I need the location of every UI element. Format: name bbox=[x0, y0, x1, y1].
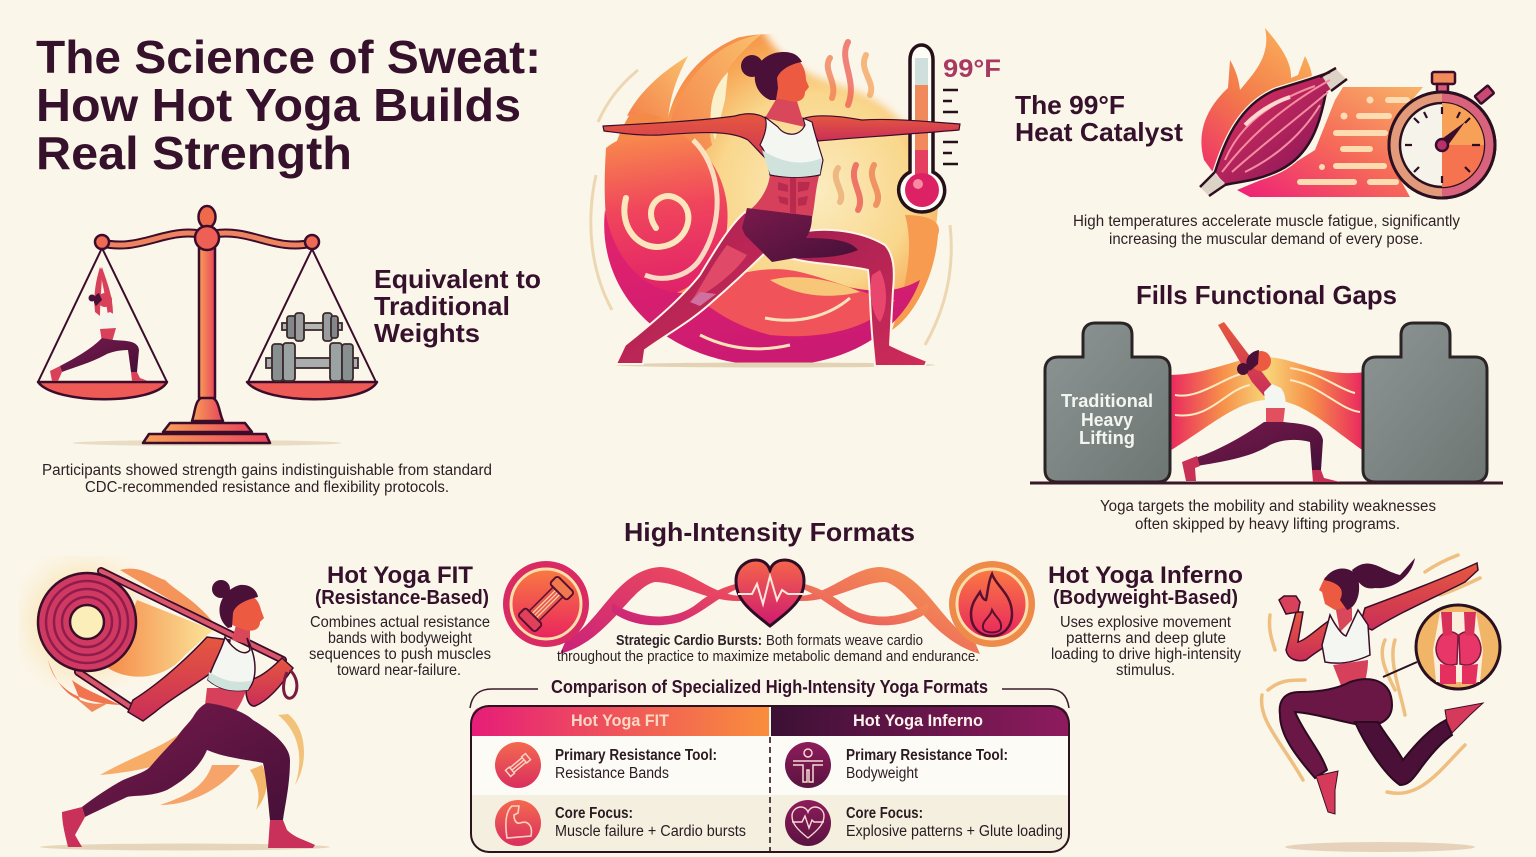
header: hot yoga fit bbox=[471, 706, 769, 736]
thermometer bbox=[899, 45, 958, 212]
illustration: lunge with resistance band roll bbox=[30, 567, 330, 850]
text: hot yoga fit description: Combines actual resistance bbox=[310, 614, 490, 631]
heading: equivalent to traditional weights: Traditional bbox=[374, 291, 510, 321]
text: high temperatures: increasing the muscular demand of every pose. bbox=[1109, 231, 1423, 248]
label: traditional heavy lifting: Lifting bbox=[1079, 428, 1135, 448]
title: Real Strength bbox=[36, 127, 352, 179]
heading: comparison bbox=[470, 677, 1069, 708]
text: hot yoga fit description: bands with bodyweight bbox=[328, 630, 473, 647]
magnifier circle: glutes bbox=[1416, 605, 1500, 689]
title bbox=[36, 31, 541, 179]
energy ribbon bbox=[1168, 357, 1365, 452]
header: hot yoga inferno: Hot Yoga Inferno bbox=[853, 711, 983, 730]
icon: heart with pulse bbox=[736, 560, 804, 626]
text: strategic cardio bursts bbox=[557, 633, 979, 665]
cell: core focus, explosive patterns bbox=[846, 805, 1063, 840]
text: strategic cardio bursts: Both formats weave cardio bbox=[766, 633, 923, 649]
cell: primary resistance tool, bands: Primary Resistance Tool: bbox=[555, 747, 717, 764]
heading: hot yoga fit bbox=[315, 562, 489, 609]
title: How Hot Yoga Builds bbox=[36, 79, 521, 131]
heading: hot yoga inferno: (Bodyweight-Based) bbox=[1053, 587, 1238, 609]
speed trail bbox=[1237, 87, 1423, 197]
flames bbox=[48, 569, 304, 810]
text: yoga targets: Yoga targets the mobility and stability weaknesses bbox=[1100, 498, 1436, 515]
heading: hot yoga inferno bbox=[1048, 562, 1243, 609]
cell: core focus, explosive patterns: Explosive patterns + Glute loading bbox=[846, 823, 1063, 840]
icon: body outline bbox=[785, 742, 831, 788]
left strands bbox=[560, 567, 742, 654]
cell: core focus, explosive patterns: Core Focus: bbox=[846, 805, 923, 822]
text: hot yoga fit description bbox=[309, 614, 491, 679]
figure: warrior pose bbox=[603, 52, 960, 366]
text: high temperatures: High temperatures accelerate muscle fatigue, significantly bbox=[1073, 213, 1460, 230]
right strands bbox=[798, 567, 980, 654]
text: hot yoga fit description: sequences to push muscles bbox=[309, 646, 491, 663]
figure bbox=[1279, 558, 1483, 814]
illustration: yoga between weight blocks bbox=[1030, 322, 1503, 483]
heading: comparison: Comparison of Specialized High-Intensity Yoga Formats bbox=[551, 677, 988, 697]
label: 99 degrees: 99°F bbox=[943, 55, 1001, 83]
illustration: balance scale with yoga and weights bbox=[38, 206, 377, 446]
header: hot yoga inferno bbox=[771, 706, 1069, 736]
heading: fills functional gaps: Fills Functional Gaps bbox=[1136, 280, 1397, 310]
text: yoga targets: often skipped by heavy lifting programs. bbox=[1135, 516, 1400, 533]
heading: high-intensity formats: High-Intensity Formats bbox=[624, 517, 915, 547]
label: traditional heavy lifting bbox=[1061, 391, 1153, 448]
stopwatch bbox=[1389, 72, 1495, 198]
cell: primary resistance tool, bodyweight: Bodyweight bbox=[846, 765, 919, 782]
cell: primary resistance tool, bodyweight bbox=[846, 747, 1008, 782]
cell: core focus, muscle failure: Muscle failure + Cardio bursts bbox=[555, 823, 746, 840]
illustration: intertwined format ribbon with heart bbox=[503, 560, 1035, 654]
figure bbox=[62, 580, 315, 848]
pointer line bbox=[1383, 662, 1417, 677]
soft top right fade bbox=[760, 26, 950, 200]
text: participants bbox=[42, 462, 492, 496]
motion swooshes bbox=[1262, 555, 1480, 793]
text: hot yoga inferno description: patterns and deep glute bbox=[1066, 630, 1226, 647]
muscle bbox=[1198, 68, 1347, 197]
illustration: muscle, flame and stopwatch bbox=[1198, 28, 1495, 198]
cell: primary resistance tool, bands: Resistance Bands bbox=[555, 765, 669, 782]
icon: flame circle bbox=[949, 561, 1035, 647]
text: hot yoga inferno description: loading to drive high-intensity bbox=[1051, 646, 1241, 663]
heading: hot yoga fit: Hot Yoga FIT bbox=[327, 562, 473, 589]
heading: equivalent to traditional weights: Weights bbox=[374, 318, 480, 348]
weight block left bbox=[1045, 323, 1170, 482]
icon: small yoga figure on left pan bbox=[50, 267, 148, 381]
comparison table bbox=[471, 706, 1069, 852]
text: yoga targets bbox=[1100, 498, 1436, 533]
lower magenta crescent bbox=[604, 210, 920, 366]
heading: the 99F heat catalyst bbox=[1015, 90, 1183, 147]
heading: hot yoga fit: (Resistance-Based) bbox=[315, 587, 489, 609]
illustration: jumping figure with glute magnifier bbox=[1262, 555, 1500, 852]
right band bbox=[892, 215, 939, 330]
text: participants: CDC-recommended resistance and flexibility protocols. bbox=[85, 479, 449, 496]
heading: hot yoga inferno: Hot Yoga Inferno bbox=[1048, 562, 1243, 589]
flame bbox=[1201, 28, 1312, 175]
text: high temperatures bbox=[1073, 213, 1460, 248]
rolled mat bbox=[38, 571, 283, 710]
title: The Science of Sweat: bbox=[36, 31, 541, 83]
icon: resistance bands bbox=[495, 742, 541, 788]
text: strategic cardio bursts: Strategic Cardio Bursts: bbox=[616, 633, 762, 649]
icon: resistance band circle bbox=[503, 561, 589, 647]
illustration: warrior pose hero with heat swirl bbox=[591, 26, 1001, 368]
heat waves bbox=[828, 42, 878, 210]
top left gap bbox=[597, 30, 760, 118]
header: hot yoga fit: Hot Yoga FIT bbox=[571, 711, 670, 730]
text: hot yoga fit description: toward near-failure. bbox=[337, 662, 461, 679]
cell: primary resistance tool, bands bbox=[555, 747, 717, 782]
cell: primary resistance tool, bodyweight: Primary Resistance Tool: bbox=[846, 747, 1008, 764]
icon: heartbeat bbox=[785, 800, 831, 846]
figure: crescent lunge bbox=[1182, 322, 1340, 482]
red swirl bbox=[605, 132, 728, 300]
icon: dumbbells on right pan bbox=[266, 313, 358, 381]
label: traditional heavy lifting: Heavy bbox=[1081, 410, 1133, 430]
weight block right bbox=[1363, 323, 1487, 482]
row backgrounds bbox=[471, 736, 1069, 852]
text: strategic cardio bursts: throughout the practice to maximize metabolic demand and endurance. bbox=[557, 649, 979, 665]
label: traditional heavy lifting: Traditional bbox=[1061, 391, 1153, 411]
text: hot yoga inferno description: Uses explosive movement bbox=[1060, 614, 1232, 631]
text: hot yoga inferno description: stimulus. bbox=[1116, 662, 1175, 679]
text: hot yoga inferno description bbox=[1051, 614, 1241, 679]
icon: bicep bbox=[495, 800, 541, 846]
heat swirl disc bbox=[591, 26, 951, 366]
cell: core focus, muscle failure bbox=[555, 805, 746, 840]
heading: the 99F heat catalyst: Heat Catalyst bbox=[1015, 117, 1183, 147]
heading: equivalent to traditional weights bbox=[374, 264, 541, 348]
text: participants: Participants showed strength gains indistinguishable from standard bbox=[42, 462, 492, 479]
cell: core focus, muscle failure: Core Focus: bbox=[555, 805, 633, 822]
heading: the 99F heat catalyst: The 99°F bbox=[1015, 90, 1125, 120]
heading: equivalent to traditional weights: Equivalent to bbox=[374, 264, 541, 294]
